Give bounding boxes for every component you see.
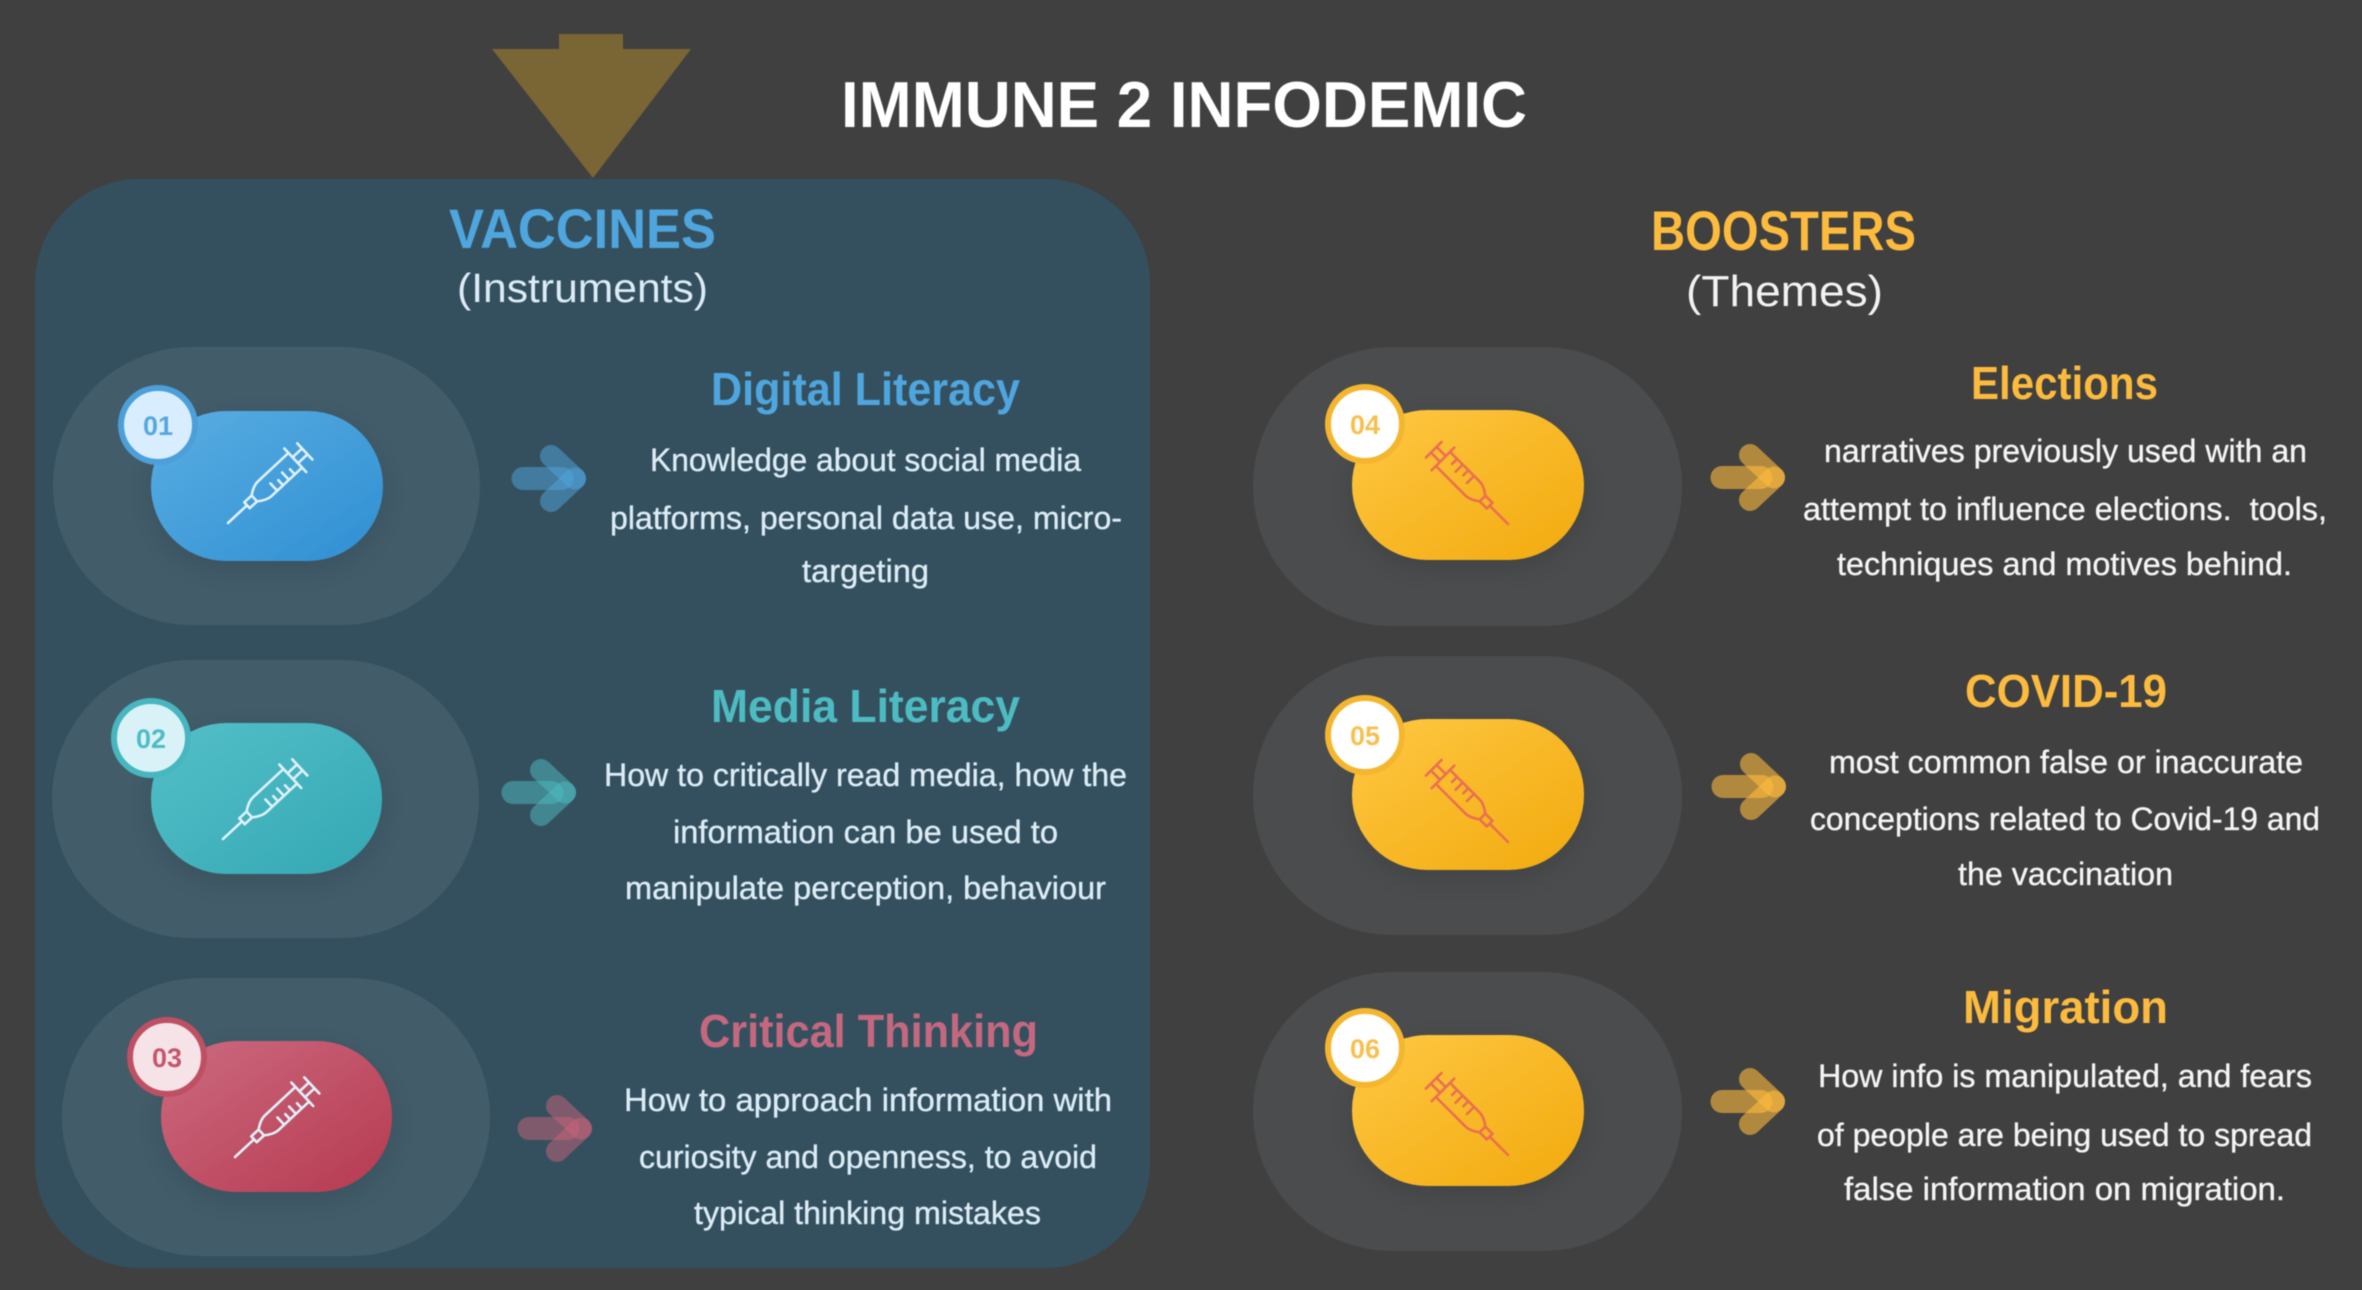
- item 05: covid-19: [1253, 656, 2320, 935]
- text: digital literacy description: [610, 442, 1122, 589]
- text: digital literacy description: Knowledge about social media: [650, 442, 1081, 478]
- text: covid-19 description: most common false or inaccurate: [1829, 744, 2303, 780]
- text: media literacy description: How to critically read media, how the: [604, 757, 1127, 793]
- text: elections description: attempt to influence elections. tools,: [1803, 491, 2327, 527]
- inner pill 01: [151, 411, 383, 561]
- text: media literacy description: [604, 757, 1127, 906]
- text: migration description: How info is manipulated, and fears: [1818, 1058, 2312, 1094]
- icon: down arrow marker: [492, 34, 691, 178]
- item 06: migration: [1253, 972, 2312, 1251]
- subheading: themes: (Themes): [1686, 267, 1883, 316]
- item 04: elections: [1253, 347, 2327, 626]
- arrow 03: [529, 1106, 581, 1151]
- icon: syringe 06: [1422, 1069, 1519, 1166]
- outer pill 06: [1253, 972, 1682, 1251]
- outer pill 02: [52, 660, 479, 938]
- badge 06: [1328, 1011, 1402, 1085]
- badge 03: [130, 1020, 204, 1094]
- arrow 04: [1722, 455, 1774, 500]
- icon: syringe 05: [1422, 756, 1519, 853]
- inner pill 05: [1352, 719, 1584, 870]
- icon: syringe 01: [217, 440, 316, 535]
- text: media literacy description: manipulate perception, behaviour: [625, 870, 1106, 906]
- arrow 02: [513, 770, 565, 815]
- badge 06: 06: [1350, 1034, 1380, 1064]
- badge 01: 01: [143, 411, 173, 441]
- text: covid-19 description: [1810, 744, 2320, 892]
- badge 05: 05: [1350, 721, 1380, 751]
- heading: critical thinking: Critical Thinking: [699, 1005, 1038, 1057]
- panel: vaccines: [35, 179, 1150, 1268]
- text: elections description: narratives previously used with an: [1824, 433, 2307, 469]
- item 02: media literacy: [52, 660, 1127, 938]
- inner pill 03: [161, 1041, 392, 1192]
- item 01: digital literacy: [53, 347, 1122, 625]
- text: migration description: false information on migration.: [1844, 1171, 2285, 1207]
- icon: syringe 04: [1422, 438, 1519, 535]
- badge 03: 03: [152, 1043, 182, 1073]
- text: migration description: [1817, 1058, 2312, 1207]
- text: covid-19 description: the vaccination: [1958, 856, 2173, 892]
- outer pill 01: [53, 347, 480, 625]
- heading: boosters: BOOSTERS: [1651, 199, 1916, 262]
- text: critical thinking description: How to approach information with: [624, 1082, 1112, 1118]
- heading: vaccines: VACCINES: [449, 197, 716, 260]
- badge 01: [121, 388, 195, 462]
- arrow 06: [1722, 1079, 1774, 1124]
- inner pill 06: [1352, 1035, 1584, 1186]
- heading: migration: Migration: [1963, 981, 2168, 1033]
- badge 02: 02: [136, 724, 166, 754]
- badge 04: [1328, 387, 1402, 461]
- text: critical thinking description: curiosity and openness, to avoid: [639, 1139, 1097, 1175]
- subheading: instruments: (Instruments): [457, 265, 708, 311]
- item 03: critical thinking: [62, 978, 1112, 1256]
- heading: covid-19: COVID-19: [1965, 665, 2167, 717]
- badge 02: [114, 701, 188, 775]
- icon: syringe 03: [224, 1074, 323, 1169]
- text: elections description: [1803, 433, 2327, 582]
- heading: digital literacy: Digital Literacy: [711, 363, 1020, 415]
- inner pill 04: [1352, 410, 1584, 560]
- text: elections description: techniques and motives behind.: [1837, 546, 2292, 582]
- outer pill 05: [1253, 656, 1682, 935]
- inner pill 02: [151, 723, 382, 874]
- text: critical thinking description: typical thinking mistakes: [694, 1195, 1041, 1231]
- text: covid-19 description: conceptions related to Covid-19 and: [1810, 801, 2320, 837]
- title: IMMUNE 2 INFODEMIC: [841, 68, 1527, 141]
- text: digital literacy description: targeting: [802, 553, 929, 589]
- outer pill 04: [1253, 347, 1682, 626]
- text: digital literacy description: platforms, personal data use, micro-: [610, 500, 1122, 536]
- arrow 01: [523, 456, 575, 501]
- heading: elections: Elections: [1971, 357, 2158, 409]
- outer pill 03: [62, 978, 490, 1256]
- text: critical thinking description: [624, 1082, 1112, 1231]
- text: media literacy description: information can be used to: [673, 814, 1058, 850]
- text: migration description: of people are being used to spread: [1817, 1117, 2312, 1153]
- heading: media literacy: Media Literacy: [711, 680, 1020, 732]
- badge 05: [1328, 698, 1402, 772]
- arrow 05: [1723, 764, 1775, 809]
- badge 04: 04: [1350, 410, 1380, 440]
- icon: syringe 02: [212, 756, 311, 851]
